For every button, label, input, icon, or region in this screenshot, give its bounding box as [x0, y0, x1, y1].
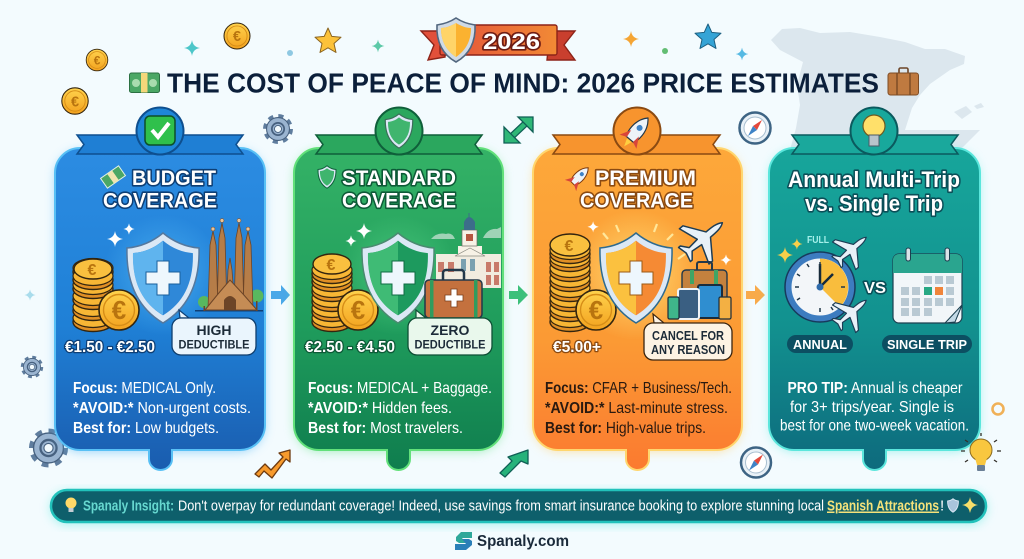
heading text: BUDGET — [132, 167, 216, 190]
ribbon — [316, 135, 482, 154]
front coin — [576, 290, 616, 330]
zigzag arrow orange — [255, 450, 290, 478]
luggage and devices — [668, 262, 731, 319]
details text — [308, 380, 492, 437]
pill: single trip: SINGLE TRIP — [887, 337, 967, 352]
icon badge: shield — [376, 108, 422, 154]
illustration glow — [338, 215, 458, 335]
arrow: orange — [746, 285, 765, 305]
avoid line: *AVOID:* Hidden fees. — [308, 400, 452, 417]
icon: bulb small — [66, 498, 76, 512]
calendar — [893, 248, 962, 323]
site name: Spanaly.com — [477, 533, 569, 550]
focus line: Focus: MEDICAL + Baggage. — [308, 380, 492, 397]
panel: premium coverage — [533, 108, 742, 470]
callout: zero deductible — [408, 310, 492, 355]
heading — [101, 166, 217, 212]
heading text 2: COVERAGE — [342, 190, 456, 212]
insight label: Spanaly Insight: — [83, 498, 174, 514]
landmark: Madrid building — [431, 213, 501, 288]
avoid line: *AVOID:* Last-minute stress. — [545, 400, 728, 417]
landmark: Sagrada Familia — [195, 218, 264, 312]
icon: shield small — [318, 166, 336, 188]
airplane top — [825, 223, 878, 276]
sparkles — [777, 238, 802, 263]
highlighted link: Spanish Attractions — [827, 498, 939, 514]
heading text 2: COVERAGE — [103, 190, 217, 212]
price: €2.50 - €4.50 — [305, 339, 395, 356]
panel: budget coverage — [55, 108, 265, 470]
coin stack — [73, 258, 113, 332]
heading text: STANDARD — [342, 167, 456, 190]
price: €1.50 - €2.50 — [65, 339, 155, 356]
insight banner — [50, 490, 987, 525]
heading text 2: vs. Single Trip — [805, 191, 943, 216]
airplane bottom — [825, 286, 878, 339]
gear left small — [23, 358, 41, 376]
pill: annual — [787, 335, 853, 353]
year badge — [421, 18, 575, 62]
sparkles — [345, 223, 372, 247]
airplane — [670, 205, 737, 272]
compass top — [740, 112, 770, 144]
sparkles — [588, 221, 732, 266]
pill: annual: ANNUAL — [793, 337, 847, 352]
logo — [455, 532, 472, 550]
decorative sparkles, dots and stars — [24, 24, 1003, 414]
coin stack — [550, 234, 590, 332]
callout: high deductible — [172, 310, 256, 355]
tip line 3: best for one two-week vacation. — [780, 418, 969, 434]
sparkles — [107, 223, 135, 247]
icon: shield small — [948, 499, 958, 512]
icon badge: check — [136, 108, 184, 154]
coin stack — [312, 254, 352, 332]
shield — [362, 233, 434, 323]
icon badge: rocket — [614, 108, 660, 154]
title text: THE COST OF PEACE OF MIND: 2026 PRICE ESTIMATES — [167, 68, 879, 98]
gear left large — [34, 433, 63, 463]
front coin — [99, 290, 139, 330]
best for line: Best for: High-value trips. — [545, 420, 706, 437]
callout line 1: CANCEL FOR — [652, 329, 724, 343]
icon: light bulb — [961, 433, 1001, 471]
arrow: blue — [271, 285, 290, 305]
medical suitcase — [425, 270, 482, 318]
arrow: green — [509, 285, 528, 305]
compass bottom — [741, 448, 771, 478]
best for line: Best for: Low budgets. — [73, 420, 219, 437]
shield — [127, 233, 199, 323]
decorative coins: € — [71, 94, 79, 110]
label: vs: VS — [864, 280, 886, 297]
heading text: PREMIUM — [595, 167, 696, 190]
callout line 2: DEDUCTIBLE — [178, 340, 250, 352]
tip line 2: for 3+ trips/year. Single is — [790, 399, 954, 416]
illustration glow — [571, 210, 701, 340]
focus line: Focus: MEDICAL Only. — [73, 380, 216, 397]
front coin: € — [351, 295, 365, 325]
icon: banknote — [130, 73, 160, 92]
insight text: Don't overpay for redundant coverage! Indeed, use savings from smart insurance booking to explore stunning local — [178, 498, 824, 514]
year label: 2026 — [483, 29, 540, 54]
pro tip text — [780, 380, 969, 434]
coin stack: € — [88, 262, 97, 279]
coin stack: € — [565, 238, 574, 255]
shield — [600, 233, 672, 323]
details text — [73, 380, 251, 437]
label: full: FULL — [807, 235, 829, 246]
decorative coins: € — [233, 29, 241, 45]
icon: sparkles — [962, 497, 978, 513]
icon badge: bulb — [850, 108, 898, 154]
clock — [785, 252, 855, 322]
details text — [545, 380, 732, 437]
map of Spain silhouette — [771, 28, 984, 150]
callout: cancel for any reason — [644, 314, 732, 360]
decorative coins: € — [94, 53, 101, 67]
icon: rocket small — [565, 162, 594, 191]
avoid line: *AVOID:* Non-urgent costs. — [73, 400, 251, 417]
ribbon — [792, 135, 958, 154]
exclamation mark: ! — [940, 498, 944, 514]
panel: annual vs single trip — [769, 108, 980, 470]
zigzag arrow green — [500, 450, 528, 477]
decorative coins — [62, 23, 250, 114]
callout line 2: ANY REASON — [651, 343, 725, 357]
coin stack: € — [327, 257, 336, 274]
callout line 1: ZERO — [431, 322, 470, 338]
best for line: Best for: Most travelers. — [308, 420, 463, 437]
tip line 1: PRO TIP: Annual is cheaper — [788, 380, 963, 397]
price: €5.00+ — [553, 339, 601, 356]
icon: suitcase — [888, 68, 918, 95]
heading text 2: COVERAGE — [580, 190, 693, 212]
heading — [318, 166, 456, 212]
heading — [788, 167, 960, 216]
title — [130, 68, 918, 98]
heading text: Annual Multi-Trip — [788, 167, 960, 192]
icon: money — [101, 166, 125, 188]
front coin: € — [112, 295, 126, 325]
callout line 2: DEDUCTIBLE — [414, 340, 486, 352]
front coin — [338, 290, 378, 330]
double arrow top green — [504, 117, 533, 143]
footer brand — [455, 532, 569, 550]
focus line: Focus: CFAR + Business/Tech. — [545, 380, 732, 397]
panel: standard coverage — [294, 108, 503, 470]
front coin: € — [589, 295, 603, 325]
gear top — [267, 118, 289, 140]
callout line 1: HIGH — [196, 322, 232, 338]
light rays — [603, 224, 685, 259]
illustration glow — [103, 215, 223, 335]
heading — [565, 162, 696, 212]
ribbon — [553, 135, 720, 154]
ribbon — [77, 135, 243, 154]
